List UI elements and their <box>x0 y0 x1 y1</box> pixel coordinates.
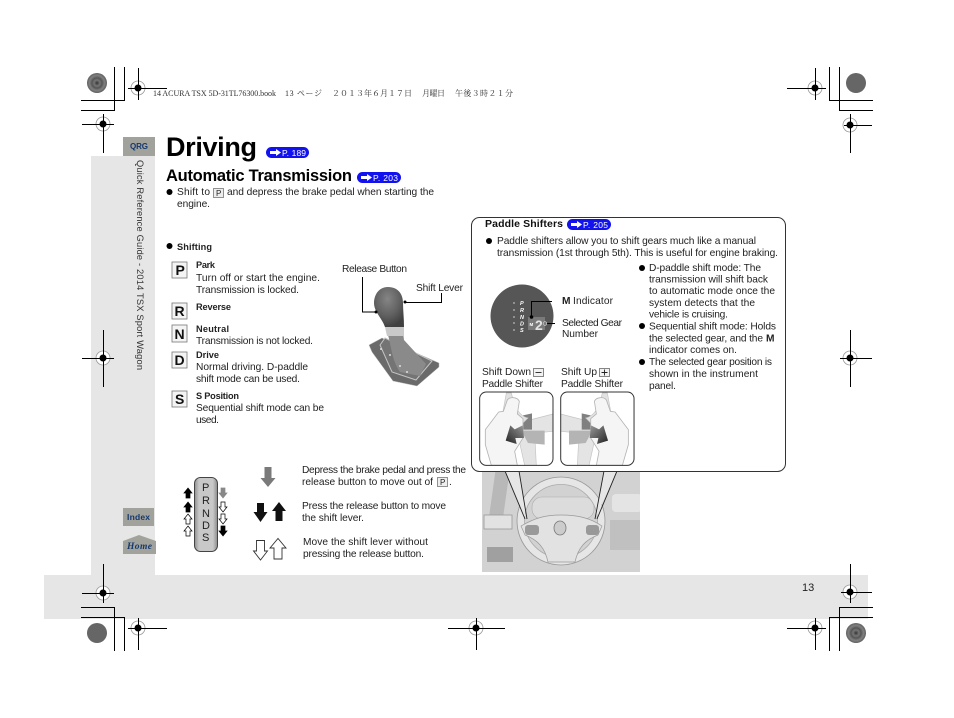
print header line: 13 ページ <box>285 89 322 98</box>
panel heading: P. 205 <box>583 220 608 230</box>
paddle mode notes: system detects that the <box>649 298 755 309</box>
shifting list <box>166 242 324 426</box>
shift lever illustration <box>369 287 439 386</box>
sidebar vertical label: Quick Reference Guide - 2014 TSX Sport Wagon <box>135 160 145 370</box>
paddle mode notes: indicator comes on. <box>649 345 737 356</box>
label: shift down paddle: Paddle Shifter <box>482 379 544 390</box>
label: M indicator <box>530 296 614 319</box>
arrow: grey down <box>260 467 276 487</box>
gear indicator gauge: S <box>520 328 524 334</box>
heading: automatic transmission: Automatic Transmission <box>166 167 352 185</box>
legend: white arrow text: pressing the release button. <box>303 549 424 560</box>
gear indicator gauge: M <box>530 322 534 327</box>
legend: grey arrow text: release button to move out of <box>302 477 433 488</box>
legend: black arrow text: Press the release button to move <box>302 501 446 512</box>
gear N: N <box>174 326 185 342</box>
print header line: 月曜日 <box>422 88 445 98</box>
callout wedges <box>505 471 617 519</box>
panel heading <box>485 218 611 230</box>
gear pattern diagram <box>184 478 227 552</box>
gear indicator gauge: 2 <box>535 317 543 333</box>
gear P: Turn off or start the engine. <box>196 273 320 284</box>
gear N: Transmission is not locked. <box>196 336 313 347</box>
page number: 13 <box>802 582 814 594</box>
gear D: D <box>174 352 185 368</box>
label: M indicator: M <box>562 296 570 307</box>
paddle mode notes: transmission will shift back <box>649 274 769 286</box>
gear pattern diagram: R <box>202 495 210 507</box>
print header line: 14 ACURA TSX 5D-31TL76300.book <box>153 89 276 98</box>
gear D: Normal driving. D-paddle <box>196 362 308 373</box>
Home tab: Home <box>126 542 153 552</box>
legend: grey arrow text <box>302 465 466 488</box>
gear S: S <box>175 391 184 407</box>
gear pattern diagram: S <box>202 532 209 544</box>
print header line: ２０１３年６月１７日 <box>332 88 412 98</box>
paddle intro text <box>486 236 778 259</box>
legend: black arrow text: the shift lever. <box>302 513 364 524</box>
Index tab: Index <box>127 512 150 522</box>
paddle mode notes: Sequential shift mode: Holds <box>649 322 776 332</box>
gear S <box>172 391 324 426</box>
gear P: P <box>176 262 185 278</box>
page reference pill: P. 203 <box>373 173 398 183</box>
registration marks <box>82 68 872 650</box>
legend: grey arrow text: Depress the brake pedal and press the <box>302 465 466 476</box>
paddle mode notes <box>639 263 776 392</box>
arrow: white down and up <box>254 538 286 560</box>
illustration: right hand on shift up paddle <box>561 392 634 465</box>
legend: grey arrow text: . <box>449 477 452 488</box>
paddle mode notes: D-paddle shift mode: The <box>649 263 761 274</box>
gear D: Drive <box>196 350 219 360</box>
label: selected gear number <box>543 318 623 340</box>
steering wheel illustration <box>482 470 642 572</box>
right arrows <box>219 488 227 536</box>
arrow: black down and up <box>254 502 286 522</box>
paddle mode notes: the selected gear, and the <box>649 334 763 344</box>
gear pattern diagram: P <box>202 482 209 494</box>
label: shift down paddle <box>482 367 544 390</box>
print header line <box>153 88 513 98</box>
gear indicator gauge <box>490 284 554 348</box>
gear N <box>172 324 313 347</box>
legend: white arrow text <box>303 537 428 560</box>
gear R <box>172 302 231 319</box>
legend: black arrow text <box>302 501 446 524</box>
QRG tab: QRG <box>130 142 148 151</box>
paddle mode notes: M <box>766 334 774 344</box>
label: shift up paddle <box>561 367 624 390</box>
Index tab <box>123 508 154 526</box>
panel: paddle shifters <box>472 218 786 472</box>
label: M indicator: Indicator <box>573 296 614 307</box>
gear D: shift mode can be used. <box>196 374 300 385</box>
intro bullet text: engine. <box>177 199 210 210</box>
intro bullet text <box>166 187 434 210</box>
gear S: used. <box>196 415 219 426</box>
paddle intro text: Paddle shifters allow you to shift gears much like a manual <box>497 236 756 247</box>
crop marks <box>81 67 873 651</box>
page reference pill: P. 189 <box>282 148 306 158</box>
paddle mode notes: The selected gear position is <box>649 357 772 368</box>
title: Driving <box>166 132 257 162</box>
gear D <box>172 350 308 385</box>
intro bullet text: and depress the brake pedal when starting the <box>227 187 434 198</box>
gear S: S Position <box>196 391 239 401</box>
gear indicator gauge: R <box>520 308 524 314</box>
left arrows <box>184 488 192 536</box>
QRG tab <box>123 137 155 156</box>
gear P <box>172 260 320 296</box>
registration discs <box>87 73 866 643</box>
gear indicator gauge: D <box>520 322 524 328</box>
label: selected gear number: Selected Gear <box>562 318 623 329</box>
paddle intro text: transmission (1st through 5th). This is useful for engine braking. <box>497 248 778 259</box>
gear R: R <box>174 303 185 319</box>
footer band <box>44 575 868 619</box>
paddle mode notes: to automatic mode once the <box>649 286 775 297</box>
paddle mode notes: panel. <box>649 381 676 392</box>
legend: grey arrow text: P <box>440 478 445 487</box>
intro bullet text: P <box>216 189 221 198</box>
intro bullet text: Shift to <box>177 187 210 198</box>
shifting list: Shifting <box>177 242 212 252</box>
label: shift lever <box>404 283 464 304</box>
gear N: Neutral <box>196 324 229 334</box>
gear R: Reverse <box>196 302 231 312</box>
legend: white arrow text: Move the shift lever without <box>303 537 428 548</box>
page reference pill <box>357 172 401 183</box>
illustration: left hand on shift down paddle <box>480 392 553 465</box>
Home tab <box>123 535 156 554</box>
gear P: Park <box>196 260 216 270</box>
label: shift down paddle: Shift Down <box>482 367 531 378</box>
gear indicator gauge: N <box>520 315 525 321</box>
label: shift lever: Shift Lever <box>416 283 464 294</box>
page reference pill <box>266 147 309 158</box>
panel heading: Paddle Shifters <box>485 218 563 230</box>
print header line: 午後３時２１分 <box>455 88 513 98</box>
label: selected gear number: Number <box>562 329 599 340</box>
title <box>166 132 309 162</box>
label: release button: Release Button <box>342 264 407 275</box>
gear pattern diagram: N <box>202 508 210 520</box>
paddle mode notes: vehicle is cruising. <box>649 310 728 320</box>
label: shift up paddle: Paddle Shifter <box>561 379 624 390</box>
paddle mode notes: shown in the instrument <box>649 369 758 380</box>
gear P: Transmission is locked. <box>196 285 299 296</box>
gear S: Sequential shift mode can be <box>196 403 324 414</box>
gear indicator gauge: P <box>520 301 524 307</box>
sidebar panel <box>91 156 155 575</box>
label: release button <box>342 264 407 314</box>
label: shift up paddle: Shift Up <box>561 367 597 378</box>
gear pattern diagram: D <box>202 520 210 532</box>
